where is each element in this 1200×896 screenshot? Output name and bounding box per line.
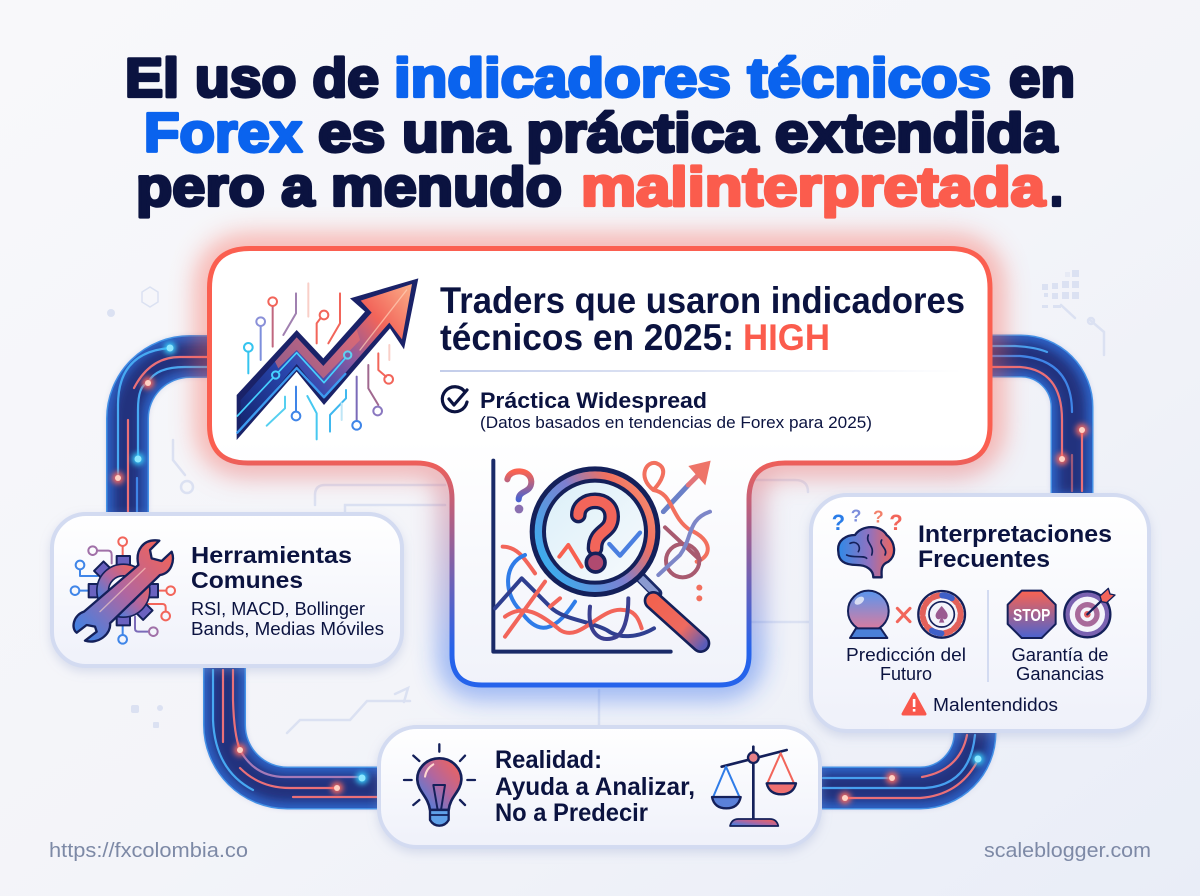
- icon: balance scales: [712, 747, 796, 826]
- decorative circuit lines in the background: [107, 270, 1104, 733]
- text: misconception labels: Predicción del: [846, 645, 966, 665]
- title: es una práctica extendida: [318, 102, 1057, 164]
- panel: main statistic with central chart: [210, 248, 990, 685]
- connector pipes: [112, 342, 1088, 804]
- title: pero a menudo: [136, 156, 562, 218]
- title: malinterpretada: [581, 156, 1045, 218]
- icon: rising arrow with circuit traces: [237, 278, 418, 440]
- title: El uso de: [125, 46, 379, 108]
- icon: brain with question marks: ?: [832, 510, 845, 535]
- pipe traces: [118, 346, 1082, 798]
- text: widespread practice note: (Datos basados en tendencias de Forex para 2025): [480, 414, 872, 432]
- icon: brain with question marks: ?: [889, 510, 903, 535]
- text: realidad: Realidad:: [495, 746, 602, 774]
- heading: traders statistic: Traders que usaron indicadores: [440, 280, 965, 321]
- text: widespread practice note: [480, 388, 872, 432]
- heading: traders statistic: [440, 280, 965, 358]
- footer: brand: scaleblogger.com: [984, 840, 1151, 862]
- icon: gear and wrench: [71, 537, 175, 644]
- text: herramientas comunes: RSI, MACD, Bollinger: [191, 598, 365, 619]
- heading: traders statistic: HIGH: [743, 317, 830, 358]
- heading: interpretaciones frecuentes: Frecuentes: [918, 546, 1050, 573]
- icon: stop sign and target: [1008, 588, 1115, 638]
- text: misconception labels: [846, 645, 1108, 684]
- divider between misconceptions: [987, 590, 989, 682]
- panel: interpretaciones frecuentes: [811, 495, 1149, 731]
- glowing dots: [112, 342, 1088, 804]
- icon: light bulb: [404, 744, 475, 826]
- text: malentendidos: Malentendidos: [933, 694, 1058, 715]
- text: misconception labels: Futuro: [880, 664, 932, 684]
- heading: interpretaciones frecuentes: Interpretaciones: [918, 521, 1112, 548]
- title: .: [1050, 156, 1063, 218]
- icon: magnifier over tangled chart: [493, 461, 711, 652]
- text: herramientas comunes: Comunes: [191, 567, 303, 593]
- text: misconception labels: Ganancias: [1016, 664, 1104, 684]
- title: Forex: [144, 102, 302, 164]
- text: realidad: No a Predecir: [495, 799, 648, 827]
- heading: interpretaciones frecuentes: [918, 521, 1112, 573]
- icon: check mark: [442, 387, 467, 412]
- icon: crystal ball and casino chip: [848, 591, 965, 638]
- footer: source url: https://fxcolombia.co: [49, 840, 248, 862]
- text: misconception labels: Garantía de: [1012, 645, 1108, 665]
- text: widespread practice note: Práctica Widespread: [480, 388, 707, 413]
- title: indicadores técnicos: [394, 46, 991, 108]
- panel: realidad: [379, 727, 820, 847]
- text: realidad: Ayuda a Analizar,: [495, 773, 695, 801]
- text: herramientas comunes: Bands, Medias Móviles: [191, 618, 384, 639]
- icon: brain with question marks: [832, 506, 903, 577]
- icon: brain with question marks: ?: [851, 506, 861, 526]
- icon: warning triangle: [903, 694, 925, 714]
- title: [125, 46, 1075, 218]
- text: herramientas comunes: [191, 542, 384, 639]
- icon: stop sign and target: STOP: [1013, 605, 1050, 625]
- text: realidad: [495, 746, 695, 827]
- title: en: [1009, 46, 1075, 108]
- text: herramientas comunes: Herramientas: [191, 542, 352, 568]
- heading: traders statistic: técnicos en 2025:: [440, 317, 734, 358]
- panel: herramientas comunes: [52, 514, 402, 666]
- icon: brain with question marks: ?: [873, 507, 884, 527]
